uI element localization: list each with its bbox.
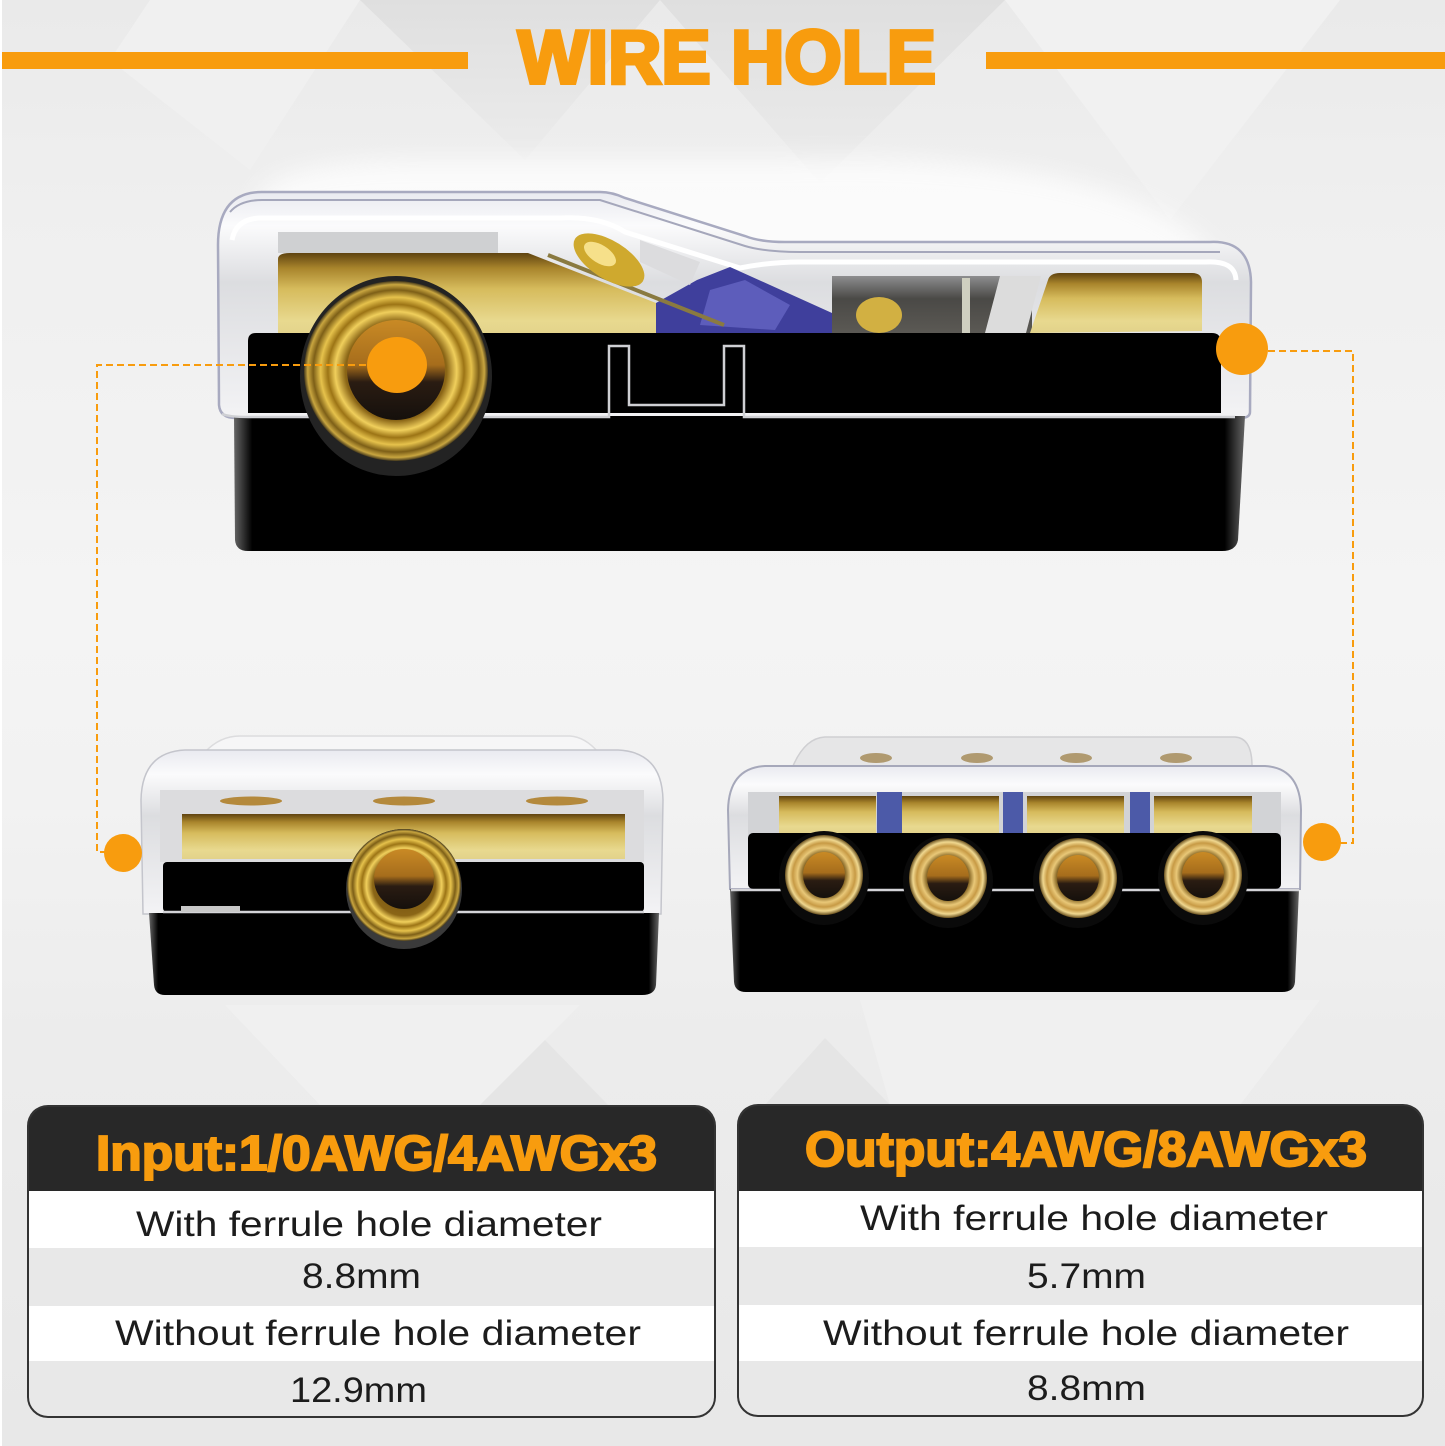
row text — [823, 1199, 1349, 1408]
product: output end view — [728, 737, 1301, 992]
slot outline — [222, 346, 1235, 417]
product: top side view — [218, 159, 1251, 551]
header bar — [738, 1105, 1423, 1191]
white label strip — [181, 906, 240, 912]
orange marker top right — [1216, 323, 1268, 375]
orange marker bottom left — [104, 834, 142, 872]
row text — [115, 1205, 641, 1410]
orange marker bottom right — [1303, 823, 1341, 861]
dashed connector: output — [1268, 351, 1353, 843]
panel: input table — [28, 1106, 715, 1417]
gold ferrule — [300, 276, 492, 476]
clear cover — [728, 766, 1301, 889]
product: input end view — [141, 736, 663, 995]
row text: 5.7mm — [1027, 1257, 1146, 1296]
panel: output table — [738, 1105, 1423, 1416]
row text: 8.8mm — [1027, 1369, 1146, 1408]
soft white halo — [230, 159, 1230, 270]
gold terminal left — [278, 253, 656, 338]
orange marker inside hole — [367, 337, 427, 393]
black upper body — [163, 862, 644, 912]
blue fuse — [656, 267, 852, 335]
gold ferrule — [346, 829, 462, 949]
gold bar — [182, 814, 625, 859]
black lower base — [149, 913, 659, 995]
table rows — [739, 1247, 1422, 1415]
black lower base — [730, 889, 1299, 992]
silver interior strip — [278, 232, 498, 253]
clear cover — [141, 750, 663, 914]
gold terminal right — [1030, 273, 1202, 333]
terminal holes — [220, 796, 588, 806]
top cap — [205, 736, 598, 752]
black upper body — [748, 833, 1281, 889]
top cap — [793, 737, 1252, 766]
table rows — [29, 1248, 714, 1416]
output ports — [779, 831, 1248, 928]
fuse screw — [565, 223, 653, 297]
gold bars — [779, 796, 1252, 834]
title: wire hole with side bars: WIRE HOLE — [518, 15, 936, 99]
header text: Input:1/0AWG/4AWGx3 — [96, 1127, 657, 1181]
row text: With ferrule hole diameter — [860, 1199, 1328, 1238]
dashed connector: input — [97, 365, 366, 852]
row text: Without ferrule hole diameter — [823, 1314, 1349, 1353]
inner black body — [248, 333, 1221, 413]
title: wire hole with side bars — [2, 15, 1445, 99]
header bar — [28, 1106, 715, 1191]
row text: Without ferrule hole diameter — [115, 1314, 641, 1353]
row text: 8.8mm — [302, 1257, 421, 1296]
screws — [860, 753, 1192, 763]
row text: 12.9mm — [290, 1371, 427, 1410]
blue fuses — [877, 792, 1150, 834]
row text: With ferrule hole diameter — [136, 1205, 602, 1244]
fuse glass right — [832, 276, 1032, 333]
header text: Output:4AWG/8AWGx3 — [805, 1123, 1367, 1177]
lower black base — [234, 416, 1245, 551]
clear cover — [218, 192, 1251, 418]
